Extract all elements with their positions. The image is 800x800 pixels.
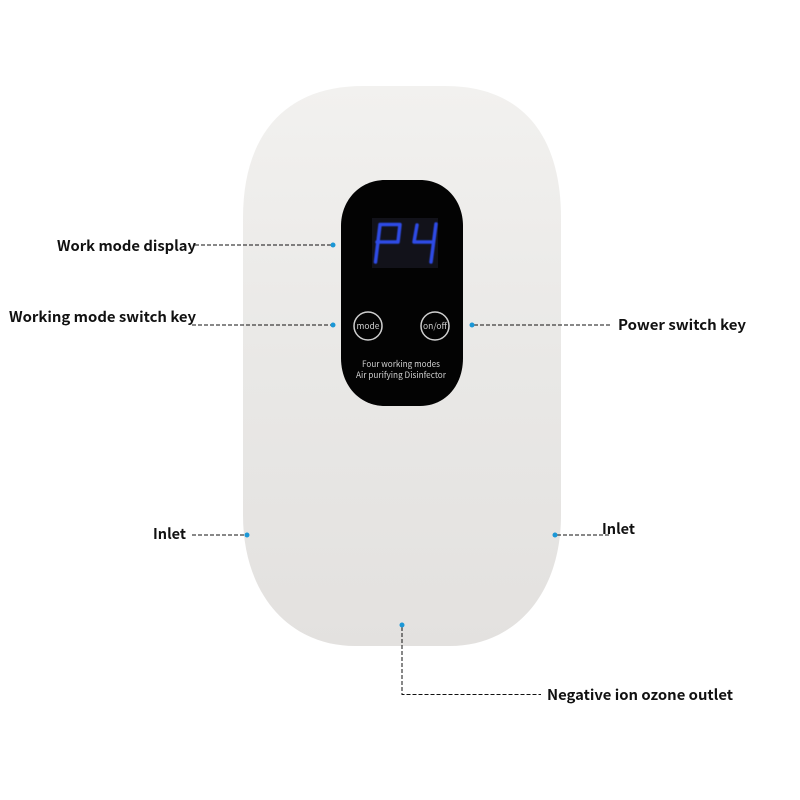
on/off button: on/off (423, 320, 448, 332)
callout: power switch key: Power switch key (618, 314, 747, 335)
callout: work mode display (57, 235, 336, 256)
callout: negative ion ozone outlet: Negative ion ozone outlet (547, 684, 733, 705)
callout: working mode switch key: Working mode switch key (9, 306, 197, 327)
mode button (354, 312, 382, 340)
panel caption: Four working modes (362, 358, 440, 370)
panel caption (356, 358, 447, 381)
digits P4 (376, 224, 436, 262)
on/off button (421, 312, 449, 340)
control panel (341, 180, 463, 406)
callout: negative ion ozone outlet (400, 622, 733, 705)
callout: power switch key (470, 314, 747, 335)
callout: work mode display: Work mode display (57, 235, 197, 256)
callout: inlet right: Inlet (602, 518, 635, 539)
callout: inlet right (552, 518, 635, 539)
panel caption: Air purifying Disinfector (356, 369, 447, 381)
panel background (341, 180, 463, 406)
callout: inlet left (153, 523, 250, 544)
LED display (372, 218, 438, 268)
callout: working mode switch key (9, 306, 336, 328)
device body (243, 86, 561, 646)
mode button: mode (356, 320, 380, 332)
display window (372, 218, 438, 268)
callout: inlet left: Inlet (153, 523, 186, 544)
